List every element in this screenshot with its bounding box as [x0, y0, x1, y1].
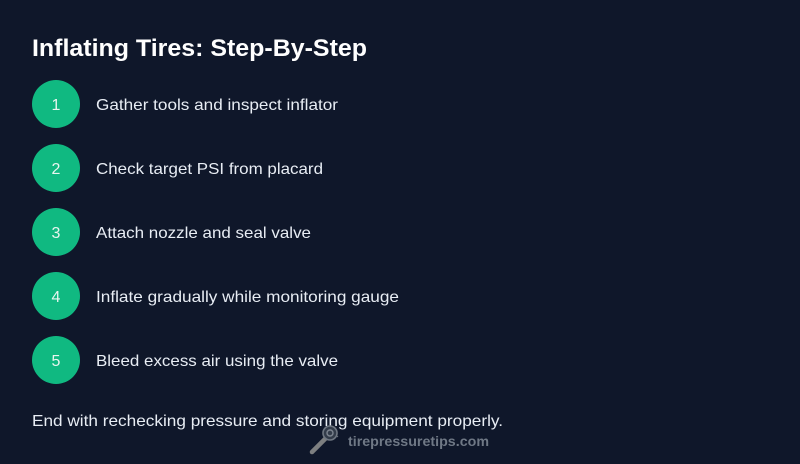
step 3: 3	[52, 225, 61, 242]
step 2: Check target PSI from placard	[96, 161, 323, 178]
step 1: 1	[52, 97, 61, 114]
step 2: 2	[52, 161, 61, 178]
step 5	[32, 336, 338, 384]
step 2	[32, 144, 323, 192]
icon: magnifier gauge	[312, 426, 338, 452]
step 3: Attach nozzle and seal valve	[96, 225, 311, 242]
site name: tirepressuretips.com	[348, 433, 489, 449]
step 5: Bleed excess air using the valve	[96, 353, 338, 370]
step 4: Inflate gradually while monitoring gauge	[96, 289, 399, 306]
step 4	[32, 272, 399, 320]
closing note: End with rechecking pressure and storing equipment properly.	[32, 413, 503, 430]
watermark	[312, 426, 489, 452]
step 5: 5	[52, 353, 61, 370]
step 1	[32, 80, 339, 128]
step 1: Gather tools and inspect inflator	[96, 97, 339, 114]
step 3	[32, 208, 311, 256]
step 4: 4	[52, 289, 61, 306]
title: Inflating Tires: Step-By-Step	[32, 35, 367, 62]
